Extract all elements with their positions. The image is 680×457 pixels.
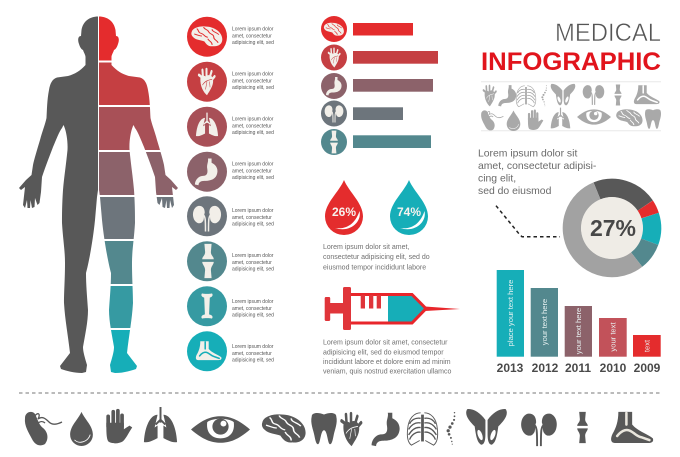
organ item: brain: adipisicing elit, sed xyxy=(232,40,274,46)
organ item: bone: amet, consectetur xyxy=(232,306,272,312)
bottom icon row xyxy=(25,407,653,446)
organ item: knee joint: Lorem ipsum dolor xyxy=(232,253,274,259)
icon: tooth xyxy=(311,413,337,444)
organ item: brain: Lorem ipsum dolor xyxy=(232,26,274,32)
icon: spine xyxy=(447,412,455,445)
bar: brain xyxy=(321,16,413,42)
body right half coloured bands xyxy=(99,16,178,373)
organ item: lungs: Lorem ipsum dolor xyxy=(232,116,274,122)
column 2010 xyxy=(599,318,627,375)
pie paragraph xyxy=(478,148,596,197)
icon: joint xyxy=(577,412,588,443)
column chart xyxy=(497,270,661,375)
organ item: stomach xyxy=(187,152,274,192)
body left half dark silhouette xyxy=(19,16,98,373)
organ item: foot: Lorem ipsum dolor xyxy=(232,344,274,350)
organ item: heart xyxy=(187,62,274,102)
title: MEDICAL xyxy=(555,19,661,47)
bar: joint xyxy=(321,129,431,155)
organ item: lungs xyxy=(187,107,274,147)
organ item: foot: amet, consectetur xyxy=(232,351,272,357)
column 2013: 2013 xyxy=(497,361,524,375)
pie paragraph: sed do eiusmod xyxy=(478,186,552,197)
red drop 26% xyxy=(325,180,363,235)
organ item: bone: Lorem ipsum dolor xyxy=(232,299,274,305)
organ item: knee joint: adipisicing elit, sed xyxy=(232,267,274,273)
icon: drop xyxy=(70,412,93,446)
title xyxy=(481,19,661,76)
syringe xyxy=(325,287,460,330)
syringe text: adipisicing elit, sed do eiusmod tempor xyxy=(323,349,444,356)
syringe text: veniam, quis nostrud exercitation ullamco xyxy=(323,368,452,376)
pie paragraph: Lorem ipsum dolor sit xyxy=(478,148,577,160)
bar: stomach xyxy=(321,73,433,99)
organ item: stomach: amet, consectetur xyxy=(232,168,272,174)
organ item: brain: amet, consectetur xyxy=(232,33,272,39)
column 2012 xyxy=(531,288,559,375)
column 2009: 2009 xyxy=(634,361,661,375)
organ item: brain xyxy=(187,17,274,57)
organ item: stomach: adipisicing elit, sed xyxy=(232,175,274,181)
drops text xyxy=(323,244,430,272)
pie paragraph: amet, consectetur adipisi- xyxy=(478,161,596,172)
organ item: foot: adipisicing elit, sed xyxy=(232,358,274,364)
column 2009: text xyxy=(642,339,652,352)
icon: pelvis xyxy=(466,409,507,445)
column 2012: your text here xyxy=(540,299,549,345)
donut chart 27% xyxy=(572,188,652,268)
organ item: lungs: amet, consectetur xyxy=(232,123,272,129)
column 2013: place your text here xyxy=(506,280,515,346)
syringe text: incididunt labore et dolore enim ad minim xyxy=(323,359,451,366)
column 2010: your text xyxy=(608,322,618,352)
syringe text: Lorem ipsum dolor sit amet, consectetur xyxy=(323,340,448,346)
icon: kidneys xyxy=(521,414,557,446)
organ item: heart: amet, consectetur xyxy=(232,78,272,84)
organ item: bone: adipisicing elit, sed xyxy=(232,313,274,319)
syringe text xyxy=(323,340,452,376)
icon: fetus xyxy=(25,412,62,445)
bar: heart xyxy=(321,44,438,70)
organ item: kidneys xyxy=(187,196,274,236)
organ item: bone xyxy=(187,286,274,326)
column 2013 xyxy=(497,270,524,375)
icon: lungs xyxy=(144,407,177,442)
teal drop 74% xyxy=(390,180,428,235)
icon: stomach xyxy=(372,413,400,446)
donut chart 27%: 27% xyxy=(590,215,636,241)
icon: ribs xyxy=(407,413,438,445)
organ item: lungs: adipisicing elit, sed xyxy=(232,130,274,136)
organ item: kidneys: Lorem ipsum dolor xyxy=(232,208,274,214)
column 2010: 2010 xyxy=(600,361,627,375)
organ item: kidneys: amet, consectetur xyxy=(232,215,272,221)
drops text: eiusmod tempor incididunt labore xyxy=(323,264,426,272)
column 2011 xyxy=(565,306,592,375)
organ item: foot xyxy=(187,331,274,371)
icon: heart xyxy=(342,414,361,446)
gray icon grid xyxy=(481,84,661,131)
organ item: heart: adipisicing elit, sed xyxy=(232,85,274,91)
column 2011: your text here xyxy=(574,308,583,354)
icon: brain xyxy=(262,414,306,443)
organ list xyxy=(187,17,274,371)
horizontal bar chart xyxy=(321,16,438,155)
drops text: consectetur adipisicing elit, sed do xyxy=(323,254,430,261)
column 2009 xyxy=(633,335,661,375)
red drop 26%: 26% xyxy=(332,205,356,219)
human body figure xyxy=(19,10,184,380)
icon: hand xyxy=(106,411,132,443)
title: INFOGRAPHIC xyxy=(481,48,661,76)
teal drop 74%: 74% xyxy=(397,205,421,219)
column 2011: 2011 xyxy=(565,361,591,375)
icon: foot xyxy=(611,412,653,443)
organ item: stomach: Lorem ipsum dolor xyxy=(232,162,274,168)
organ item: knee joint: amet, consectetur xyxy=(232,260,272,266)
organ item: knee joint xyxy=(187,241,274,281)
organ item: kidneys: adipisicing elit, sed xyxy=(232,222,274,228)
icon: eye xyxy=(191,416,250,443)
drops text: Lorem ipsum dolor sit amet, xyxy=(323,244,409,251)
organ item: heart: Lorem ipsum dolor xyxy=(232,72,274,78)
pie paragraph: cing elit, xyxy=(478,174,516,184)
dashed leader line xyxy=(496,206,560,237)
column 2012: 2012 xyxy=(532,361,559,375)
bar: kidneys xyxy=(321,100,403,126)
